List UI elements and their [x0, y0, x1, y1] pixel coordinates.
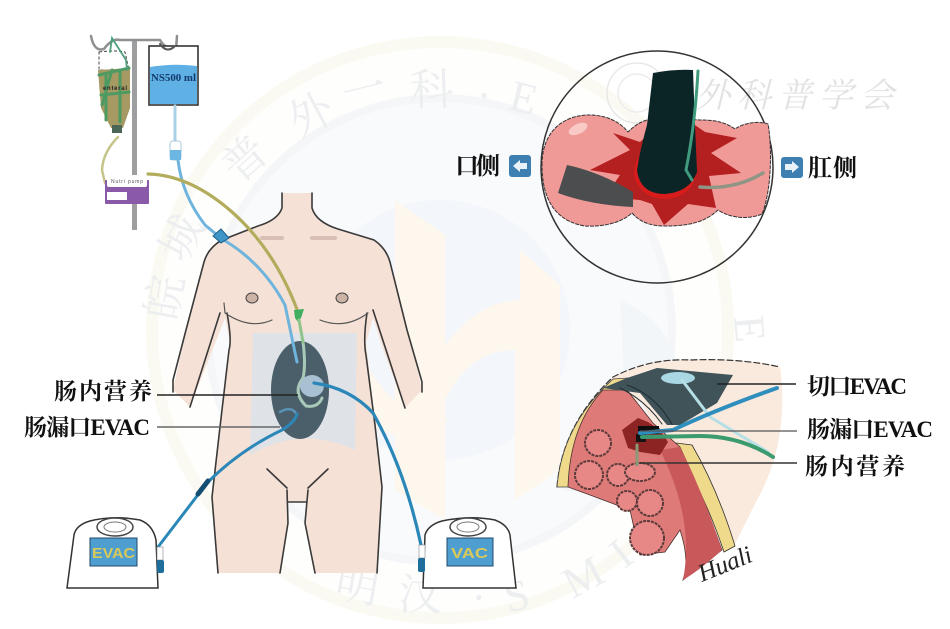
watermark: circular society seal: 汶 — [398, 570, 443, 621]
feeding pump: Nutri pump — [111, 179, 143, 185]
seal and calligraphy logo top right — [607, 63, 898, 123]
watermark: circular society seal: 城 — [150, 207, 214, 269]
incision tube — [661, 372, 695, 384]
feeding pump — [105, 175, 149, 204]
bowel loops — [575, 430, 664, 555]
signature: Huali — [693, 542, 756, 588]
saline bag — [149, 44, 198, 105]
endoscope tube — [637, 70, 697, 194]
watermark: circular society seal: · — [469, 573, 488, 623]
drip chamber — [170, 106, 181, 160]
dark foam — [603, 368, 733, 425]
dark foam dressing on abdomen — [271, 341, 329, 439]
watermark: circular society seal — [138, 42, 775, 623]
feeding catheter — [636, 445, 638, 465]
left drain tube — [158, 414, 297, 547]
blue infusion line — [178, 160, 297, 362]
label: oral side — [455, 152, 531, 180]
watermark: circular society seal: M — [554, 546, 612, 608]
watermark: circular society seal: 皖 — [138, 272, 194, 323]
label: anal side: 肛侧 — [808, 154, 857, 182]
label: oral side: 口侧 — [455, 152, 500, 180]
green guide — [686, 71, 698, 180]
cross-section of abdomen — [557, 360, 782, 588]
abdominal dressing film — [250, 333, 357, 455]
watermark: circular society seal: 普 — [213, 126, 278, 192]
seal and calligraphy logo top right: 外科普学会 — [696, 68, 898, 117]
infusion pole — [91, 36, 177, 230]
yellow fat right — [676, 443, 735, 552]
right drain tube — [314, 383, 421, 545]
bowel strip — [660, 447, 722, 580]
blue tube — [640, 388, 777, 433]
red ring — [634, 145, 696, 199]
right callout: incision EVAC: 切口EVAC — [807, 374, 907, 399]
fistula star — [622, 418, 668, 455]
watermark: circular society seal: 明 — [332, 558, 383, 614]
label: anal side — [781, 154, 857, 182]
left EVAC device — [67, 518, 164, 588]
enteral nutrition bottle: enteral — [103, 86, 127, 92]
watermark: circular society seal: L — [628, 508, 682, 562]
tear star — [590, 122, 741, 225]
black foam block — [638, 426, 659, 434]
saline bag: NS500 ml — [151, 73, 196, 84]
right callout: enteral nutrition: 肠内营养 — [805, 454, 905, 479]
watermark: circular society seal: E — [724, 313, 775, 344]
left callout: fistula EVAC: 肠漏口EVAC — [24, 415, 150, 440]
grey feeding tube — [700, 173, 763, 187]
watermark: circular society seal: I — [600, 530, 642, 577]
human body — [173, 193, 422, 573]
yellow fat left — [557, 378, 628, 487]
yellow feeding line — [148, 174, 304, 342]
right callout: fistula EVAC: 肠漏口EVAC — [807, 417, 933, 442]
feeding tube from bottle to pump — [102, 137, 118, 183]
right EVAC device — [418, 518, 516, 588]
watermark: circular society seal: E — [505, 71, 542, 125]
right EVAC device: VAC — [451, 545, 488, 562]
left EVAC device: EVAC — [92, 545, 135, 562]
watermark: circular society seal: S — [500, 569, 534, 622]
left callout: enteral nutrition: 肠内营养 — [54, 379, 152, 404]
central swirl of enteral tube — [280, 342, 324, 415]
intestine — [542, 115, 770, 226]
bowel mass — [568, 390, 722, 580]
skin — [557, 360, 782, 548]
left tube connector — [198, 481, 208, 494]
magnified circle: fistula interior — [541, 51, 773, 283]
enteral nutrition bottle — [98, 38, 130, 133]
green tube — [642, 436, 773, 457]
watermark: circular society seal: · — [473, 70, 495, 121]
watermark: circular society seal: 科 — [409, 65, 454, 116]
grey stent part — [558, 165, 633, 207]
watermark: circular society seal: 外 — [280, 83, 343, 147]
watermark: circular society seal: 一 — [337, 62, 392, 120]
breasts — [224, 238, 368, 324]
